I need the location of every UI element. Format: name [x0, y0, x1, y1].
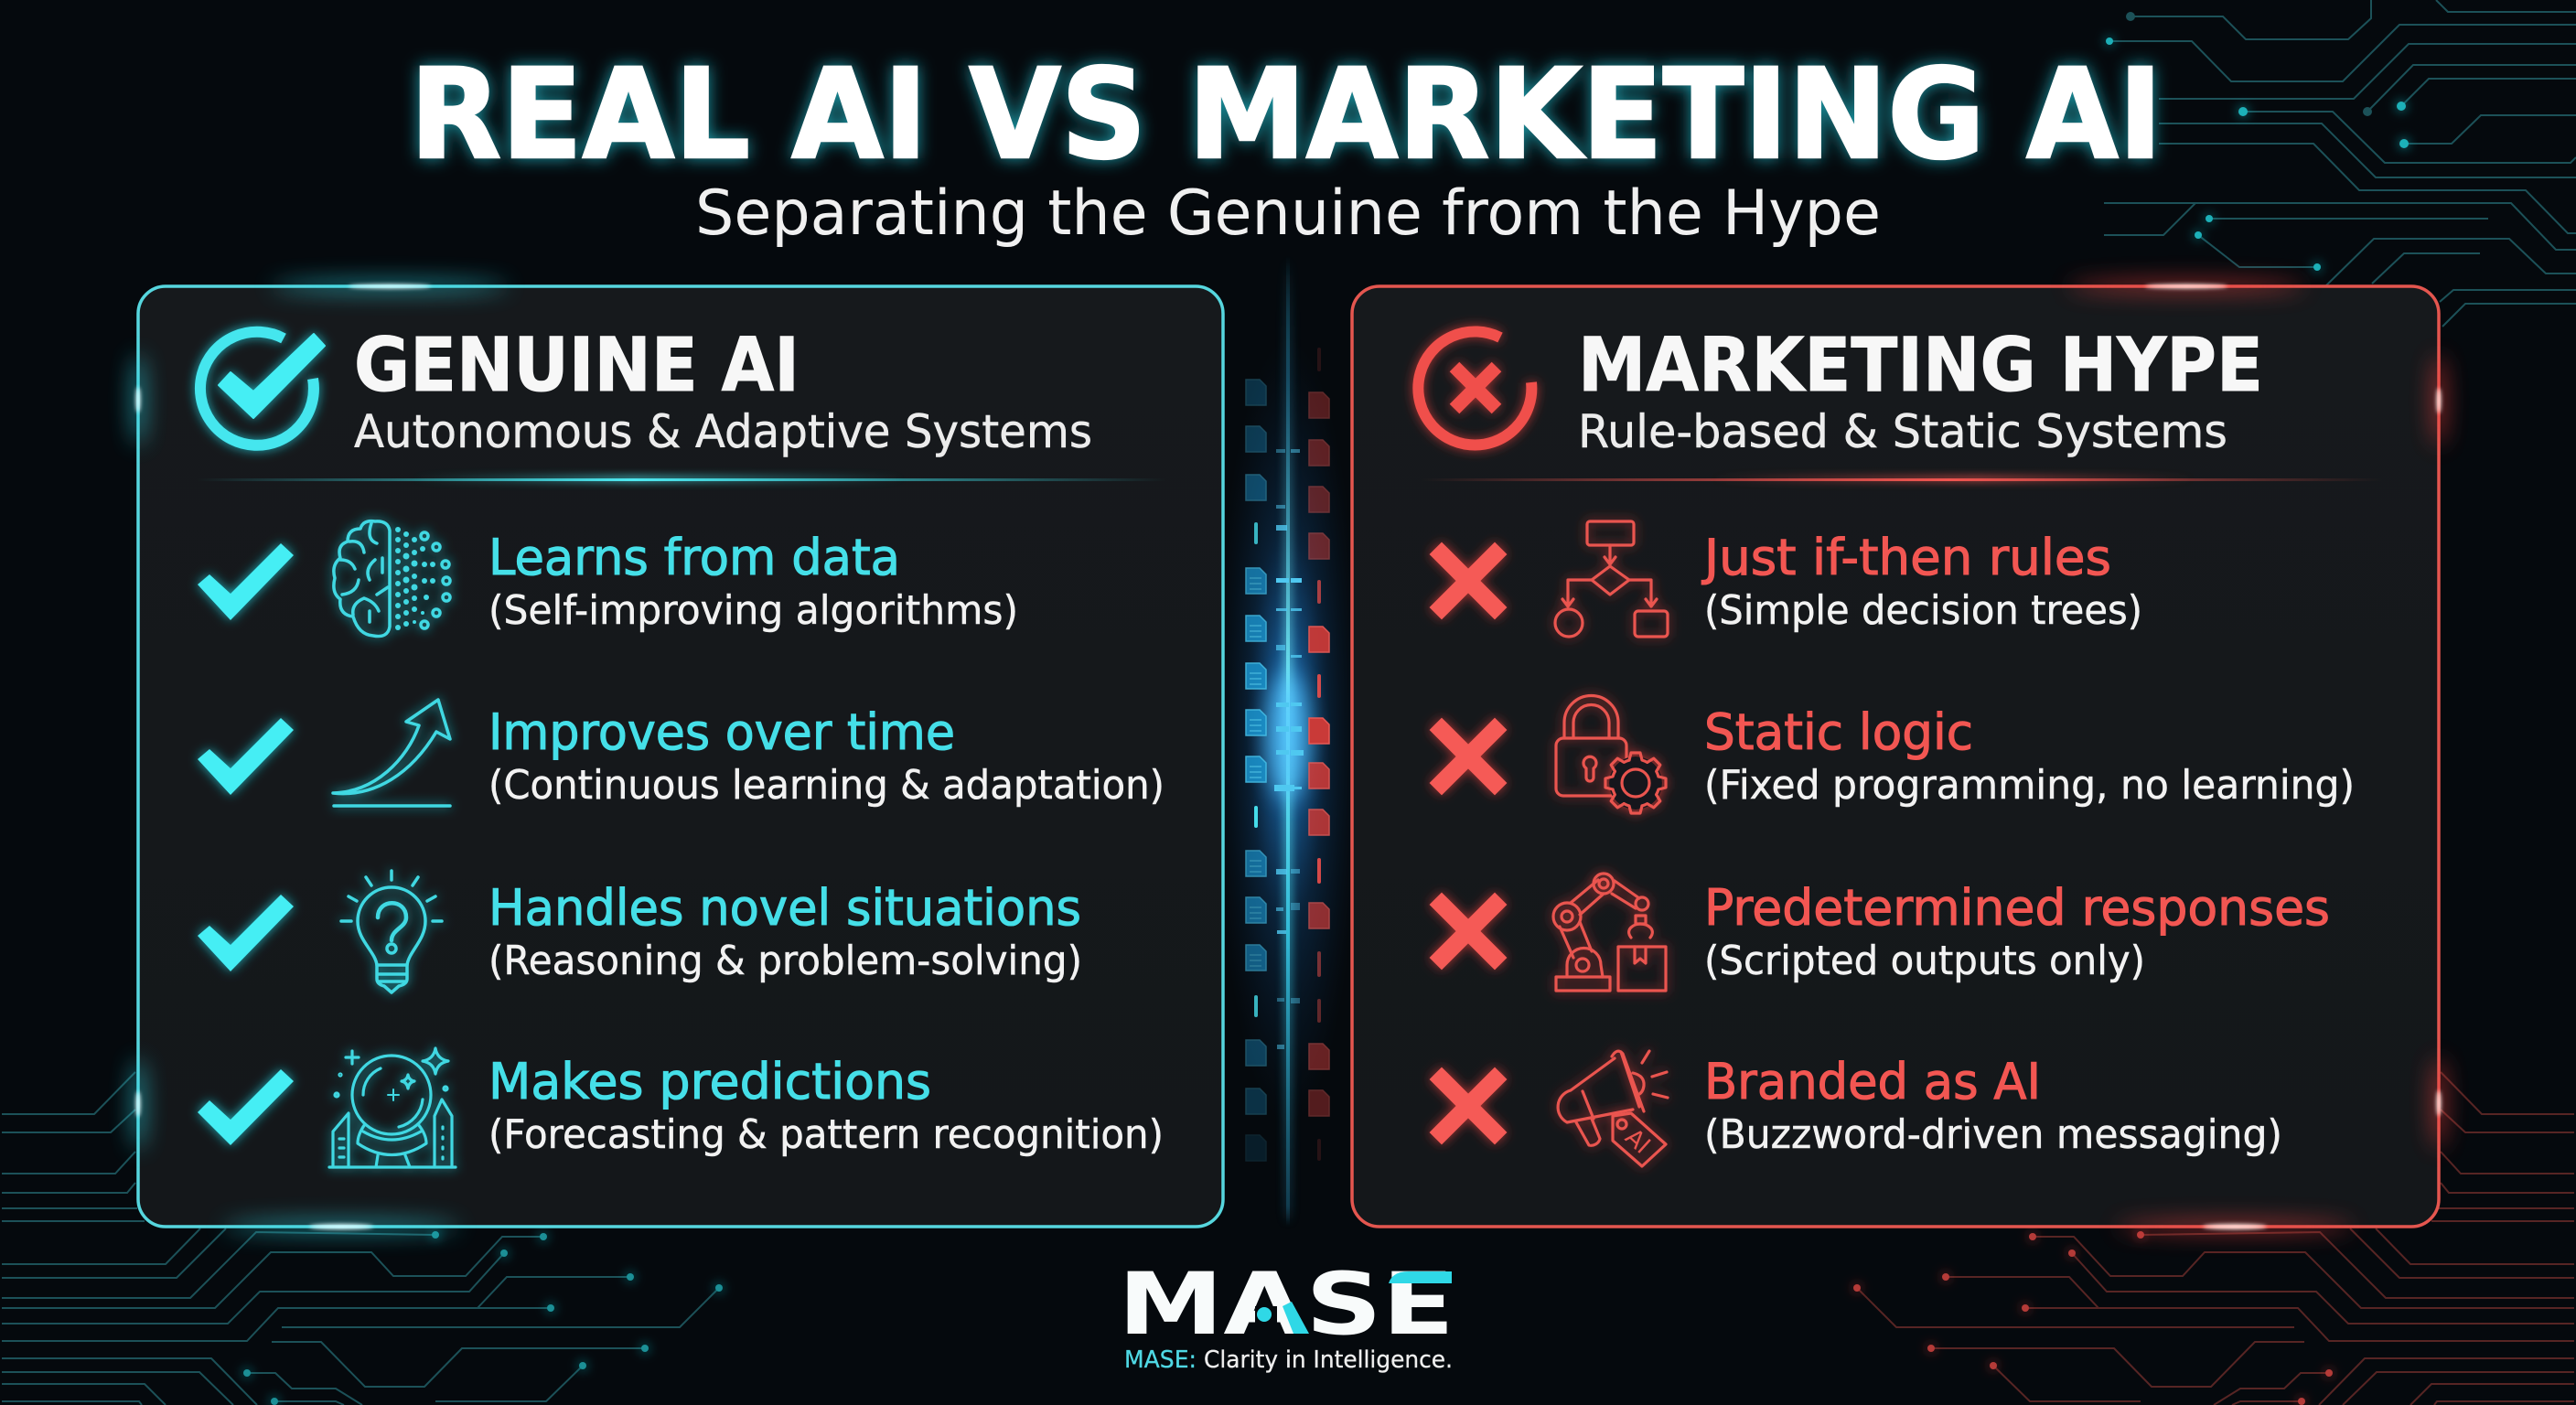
- item text: learns from data: [488, 529, 1018, 634]
- item text: branded as AI: (Buzzword-driven messaging): [1704, 1111, 2282, 1158]
- item text: learns from data: Learns from data: [488, 529, 900, 586]
- icon: header x circle: [1418, 331, 1531, 445]
- circuit traces: bottom right: [1853, 1072, 2574, 1405]
- center data stream: [1215, 256, 1361, 1226]
- item text: improves over time: (Continuous learning & adaptation): [488, 762, 1165, 809]
- icon: robot arm and box: [1553, 874, 1666, 991]
- check 4: [198, 1069, 294, 1145]
- panel glow highlights: [132, 280, 509, 1233]
- subheading: Rule-based & Static Systems: [1578, 405, 2227, 458]
- item text: handles novel situations: [488, 879, 1082, 984]
- item text: static logic: Static logic: [1704, 703, 1973, 761]
- item text: learns from data: (Self-improving algorithms): [488, 587, 1018, 634]
- item text: branded as AI: [1704, 1053, 2282, 1158]
- icon: brain and data: [334, 521, 450, 637]
- item text: predetermined responses: [1704, 879, 2330, 984]
- item text: predetermined responses: (Scripted outputs only): [1704, 938, 2145, 984]
- icon: rising arrow: [333, 700, 450, 806]
- check 3: [198, 895, 294, 971]
- icon: lightbulb question: [341, 871, 442, 992]
- item text: branded as AI: Branded as AI: [1704, 1053, 2041, 1110]
- item text: just if-then rules: Just if-then rules: [1701, 529, 2111, 586]
- heading: marketing hype: MARKETING HYPE: [1578, 323, 2263, 409]
- icon: megaphone with AI tag: [1558, 1051, 1668, 1166]
- item text: handles novel situations: Handles novel situations: [488, 879, 1081, 937]
- panel glow highlights: [2067, 280, 2445, 1233]
- icon: flowchart: [1555, 521, 1668, 637]
- panel: marketing hype: [1352, 280, 2445, 1233]
- item text: static logic: [1704, 703, 2355, 809]
- divider: [1421, 475, 2383, 483]
- item text: makes predictions: Makes predictions: [488, 1053, 931, 1110]
- logo: MASE: MASE: [1118, 1255, 1454, 1355]
- subheading: Autonomous & Adaptive Systems: [354, 405, 1092, 458]
- circuit traces: top right: [2104, 0, 2576, 327]
- item text: improves over time: Improves over time: [488, 703, 955, 761]
- x mark 3: [1442, 905, 1495, 958]
- icon: header check circle: [200, 332, 325, 445]
- title: REAL AI VS MARKETING AI: [410, 43, 2163, 188]
- item text: makes predictions: [488, 1053, 1164, 1158]
- item text: improves over time: [488, 703, 1165, 809]
- x mark 1: [1442, 554, 1495, 607]
- item text: predetermined responses: Predetermined responses: [1704, 879, 2330, 937]
- tagline: Clarity in Intelligence.: [1204, 1346, 1453, 1374]
- x mark 2: [1442, 730, 1495, 783]
- x mark 4: [1442, 1079, 1495, 1132]
- subtitle: Separating the Genuine from the Hype: [695, 177, 1881, 250]
- panel: genuine AI: [132, 280, 1223, 1233]
- item text: handles novel situations: (Reasoning & problem-solving): [488, 938, 1082, 984]
- divider: [197, 475, 1166, 483]
- tagline: MASE:: [1124, 1346, 1197, 1374]
- item text: static logic: (Fixed programming, no learning): [1704, 762, 2355, 809]
- item text: just if-then rules: (Simple decision trees): [1704, 587, 2142, 634]
- circuit traces: bottom left: [2, 1072, 723, 1405]
- item text: just if-then rules: [1701, 529, 2142, 634]
- item text: makes predictions: (Forecasting & pattern recognition): [488, 1111, 1164, 1158]
- icon: lock and gear: [1556, 695, 1666, 813]
- heading: genuine AI: GENUINE AI: [354, 323, 800, 409]
- icon: crystal ball and city: [329, 1048, 456, 1167]
- icon: megaphone with AI tag: AI: [1619, 1123, 1656, 1160]
- check 2: [198, 718, 294, 795]
- check 1: [198, 543, 294, 620]
